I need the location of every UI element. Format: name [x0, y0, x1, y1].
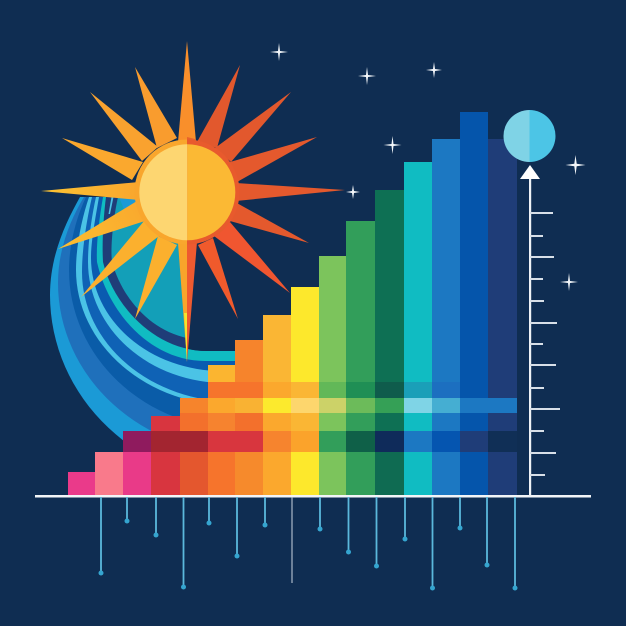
concentric blue arcs — [50, 197, 235, 440]
column 10 — [319, 256, 346, 496]
column 12 — [375, 190, 404, 496]
sun — [41, 41, 345, 362]
column 13 — [404, 162, 432, 496]
column 14 — [432, 139, 460, 496]
drop lines below axis — [98, 497, 518, 590]
column 3 — [123, 431, 151, 496]
column 5 — [180, 398, 208, 496]
column 4 — [151, 416, 180, 496]
column 15 — [460, 112, 488, 496]
column 1 — [68, 472, 95, 496]
stepped rainbow bar chart — [68, 112, 517, 496]
axes — [35, 165, 591, 498]
stars — [270, 43, 586, 291]
sun rays — [41, 41, 345, 362]
column 16 — [488, 139, 517, 496]
sun ring — [134, 140, 240, 244]
column 2 — [95, 452, 123, 496]
column 9 — [291, 287, 319, 496]
moon circle — [504, 110, 556, 162]
horizontal axis — [35, 495, 591, 498]
column 11 — [346, 221, 375, 496]
column 7 — [235, 340, 263, 496]
axis ticks — [530, 212, 560, 476]
infographic canvas — [35, 42, 591, 590]
column 8 — [263, 315, 291, 496]
column 6 — [208, 365, 235, 496]
vertical axis — [529, 176, 531, 496]
sun disc — [139, 144, 235, 240]
axis arrow — [520, 165, 540, 179]
